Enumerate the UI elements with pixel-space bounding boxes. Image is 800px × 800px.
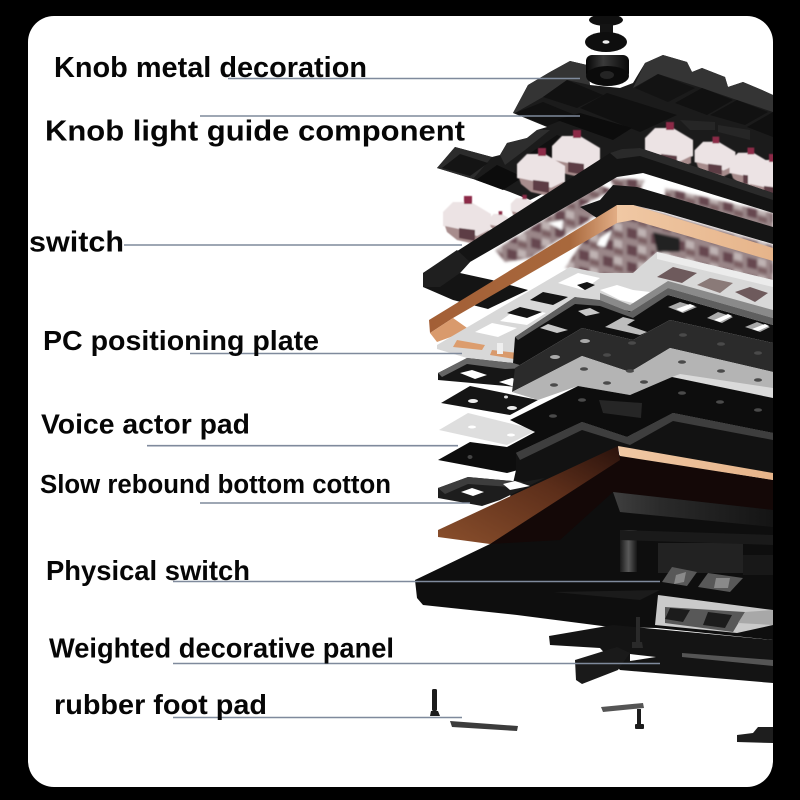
slow rebound bottom cotton: [438, 413, 773, 506]
leader line: physical switch: [173, 580, 660, 582]
grey sound pad and voice actor pad: [439, 348, 773, 445]
physical switches: [662, 567, 743, 592]
main bottom case: [415, 455, 773, 640]
leader line: switch: [124, 244, 462, 246]
copper frame: [429, 205, 773, 342]
label: rubber foot pad: rubber foot pad: [54, 689, 267, 720]
leader line: slow rebound bottom cotton: [200, 502, 470, 504]
label: Voice actor pad: Voice actor pad: [41, 408, 250, 440]
leader line: weighted decorative panel: [173, 662, 660, 664]
label: Knob metal decoration: Knob metal decoration: [54, 52, 367, 84]
label: Physical switch: Physical switch: [46, 555, 250, 586]
label: Knob light guide component: Knob light guide component: [45, 116, 466, 148]
leader line: knob metal decoration: [228, 78, 580, 80]
label: Slow rebound bottom cotton: Slow rebound bottom cotton: [40, 471, 391, 499]
rubber foot pad and screw, middle: [601, 703, 644, 729]
leader line: rubber foot pad: [173, 716, 462, 718]
lower switch bodies behind the frames: [495, 178, 773, 284]
pink switches: [443, 122, 796, 244]
black top frame: [423, 148, 773, 309]
PC positioning plate: [437, 252, 773, 363]
keycaps and knob light guide component: [437, 55, 773, 205]
silver bracket with ports: [655, 595, 773, 633]
leader line: knob light guide component: [200, 115, 580, 117]
weighted decorative panel: [549, 617, 773, 684]
dark speckled plate with mount holes: [441, 320, 773, 415]
copper weighted plate: [438, 446, 773, 544]
label: switch: switch: [29, 226, 124, 258]
black gasket layer with grey rim: [438, 288, 773, 387]
rubber foot pad, right: [737, 727, 773, 743]
knob metal decoration: [585, 14, 629, 86]
exploded keyboard artwork: [415, 14, 796, 743]
label: PC positioning plate: PC positioning plate: [43, 325, 319, 356]
label: Weighted decorative panel: Weighted decorative panel: [49, 632, 394, 664]
rubber foot pad and screw, left: [430, 689, 518, 731]
inner black frame: [580, 185, 773, 244]
leader line: voice actor pad: [147, 445, 458, 447]
leader line: PC positioning plate: [190, 352, 462, 354]
black plate: [438, 377, 773, 473]
